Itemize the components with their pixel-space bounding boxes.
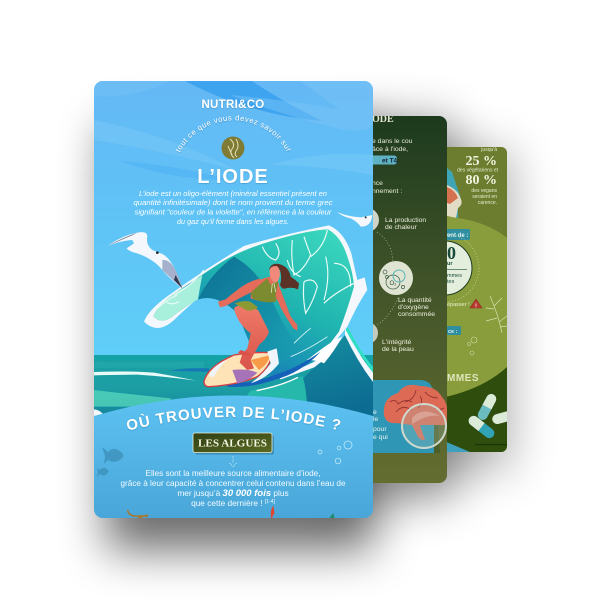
- panel: lower blue section: [94, 396, 373, 518]
- icon: brain with magnifier: [384, 385, 447, 448]
- tag: ce :: [448, 329, 458, 335]
- text: influence: nnement :: [372, 188, 402, 195]
- illustration: figure: [447, 168, 461, 218]
- text: influence: nce: [372, 180, 383, 187]
- right arm: [276, 283, 297, 331]
- icon: coral: [486, 296, 507, 333]
- text: intégrité de la peau: de la peau: [382, 346, 414, 353]
- upper statistics panel: des végétariens et: [457, 168, 499, 174]
- icon: skin circle: [373, 324, 378, 342]
- upper statistics panel: 25 %: [466, 154, 497, 169]
- upper statistics panel: seraient en: [472, 194, 497, 200]
- text: production de chaleur: [385, 218, 426, 229]
- daily need tag: ent de :: [447, 233, 468, 239]
- intro paragraph: signifiant "couleur de la violette", en référence à la couleur: [134, 208, 332, 216]
- icon: heat circle: [373, 210, 379, 230]
- upper statistics panel: [457, 147, 507, 204]
- panel: blue callout: [373, 380, 440, 453]
- text: quantité d'oxygène: La quantité: [398, 297, 432, 304]
- body text: mer jusqu’à 30 000 fois plus: [177, 488, 289, 499]
- heading: femmes: MMES: [447, 373, 479, 384]
- panel: front card, iodine: [94, 81, 373, 518]
- bubbles: [318, 441, 352, 464]
- badge: les algues: LES ALGUES: [198, 438, 267, 450]
- panel: blue callout: pour: [373, 426, 387, 433]
- upper statistics panel: des vegans: [471, 188, 497, 194]
- seabed creatures: [128, 507, 334, 518]
- icon: oxygen: O₂: [390, 281, 397, 287]
- soft shadows: [106, 120, 512, 550]
- decorative clouds: [94, 81, 373, 180]
- dotted connector: [376, 232, 398, 325]
- daily need tag: [445, 229, 470, 240]
- illustration: seagull right: [337, 212, 372, 227]
- body text: [120, 468, 346, 508]
- heading: iode: ODE: [372, 114, 394, 125]
- illustration: seagull left: [108, 232, 182, 288]
- intro paragraph: L’iode est un oligo-élément (minéral essentiel présent en: [139, 189, 327, 198]
- intro text: e dans le cou: [372, 138, 413, 145]
- wave white crest: [144, 225, 367, 379]
- tag: T3 et T4: [373, 156, 398, 164]
- body text: grâce à leur capacité à concentrer celui contenu dans l’eau de: [120, 478, 346, 488]
- body text: [1-4]: [265, 499, 276, 505]
- tag: [447, 326, 461, 335]
- text: influence: [373, 182, 402, 193]
- text: intégrité de la peau: [382, 339, 414, 353]
- panel: dark green bottom: [447, 367, 507, 452]
- text: quantité d'oxygène: d'oxygène: [398, 304, 429, 311]
- intro paragraph: quantité infinitésimale) dont le nom provient du terme grec: [134, 198, 333, 207]
- icon: seaweed medallion: [222, 136, 244, 160]
- text: quantité d'oxygène: [398, 298, 435, 316]
- text: quantité d'oxygène: consommée: [398, 311, 435, 318]
- text: production de chaleur: de chaleur: [385, 224, 417, 231]
- panel: blue callout: le: [373, 416, 379, 423]
- arched subtitle: tout ce que vous devez savoir sur: [176, 115, 291, 153]
- tag: T3 et T4: et T4.: [382, 158, 399, 164]
- intro paragraph: du gaz qu’il forme dans les algues.: [177, 217, 289, 226]
- wave tip pale: [153, 275, 202, 321]
- panel: light green curved section: [447, 216, 507, 452]
- panel: back card, vitamins and needs: [447, 147, 507, 452]
- body text: Elles sont la meilleure source alimentaire d’iode,: [146, 468, 320, 478]
- icon: capsules: [468, 394, 507, 438]
- top: [251, 278, 278, 302]
- panel: blue callout: e: [373, 409, 377, 416]
- intro text: [373, 138, 412, 152]
- sky background: [94, 81, 373, 381]
- intro paragraph: [134, 189, 333, 226]
- bikini bottom: [235, 301, 258, 311]
- legs: [234, 305, 269, 370]
- logo: NUTRI&CO: [201, 99, 265, 111]
- intro text: âce à l'iode,: [372, 146, 408, 153]
- surfer: [218, 264, 299, 370]
- foam around board: [209, 348, 279, 383]
- daily need circle: mmes: [447, 273, 462, 279]
- upper statistics panel: carence.: [478, 200, 497, 206]
- text: intégrité de la peau: L'intégrité: [382, 339, 411, 346]
- daily need circle: [447, 234, 480, 302]
- warning: !: [475, 303, 477, 309]
- face: [270, 266, 280, 283]
- hair: [269, 264, 299, 289]
- icon: fish: [97, 447, 123, 477]
- front turquoise swell: [227, 376, 307, 420]
- wave inner curl: [198, 257, 301, 377]
- panel: blue callout: e qui: [373, 434, 388, 441]
- daily need circle: ur: [447, 261, 453, 267]
- arched heading: OÙ TROUVER DE L’IODE ?: [126, 406, 341, 431]
- heading: L'IODE: L’IODE: [197, 166, 269, 188]
- badge: les algues: [193, 433, 274, 454]
- bubbles: [468, 337, 477, 355]
- illustration: surfer on wave: [94, 225, 374, 422]
- text: production de chaleur: La production: [385, 217, 426, 224]
- left arm: [218, 278, 261, 307]
- warning: épasser !: [447, 302, 470, 308]
- statistic: 25%: jusqu'à: [480, 147, 497, 153]
- sea: [94, 360, 373, 414]
- foam lattice: [156, 230, 354, 360]
- wave body: [153, 229, 354, 377]
- warning: [447, 299, 482, 309]
- daily need circle: tes: [447, 279, 455, 285]
- icon: oxygen: [379, 261, 413, 295]
- body text: que cette dernière !: [191, 498, 263, 508]
- torso: [251, 277, 279, 302]
- panel: middle card, thyroid roles: [373, 116, 447, 483]
- surfboard: [204, 352, 272, 387]
- upper statistics panel: 80 %: [466, 173, 497, 188]
- daily need circle: 0: [447, 243, 456, 263]
- right back wave: [281, 335, 374, 420]
- arrow down: [230, 456, 236, 466]
